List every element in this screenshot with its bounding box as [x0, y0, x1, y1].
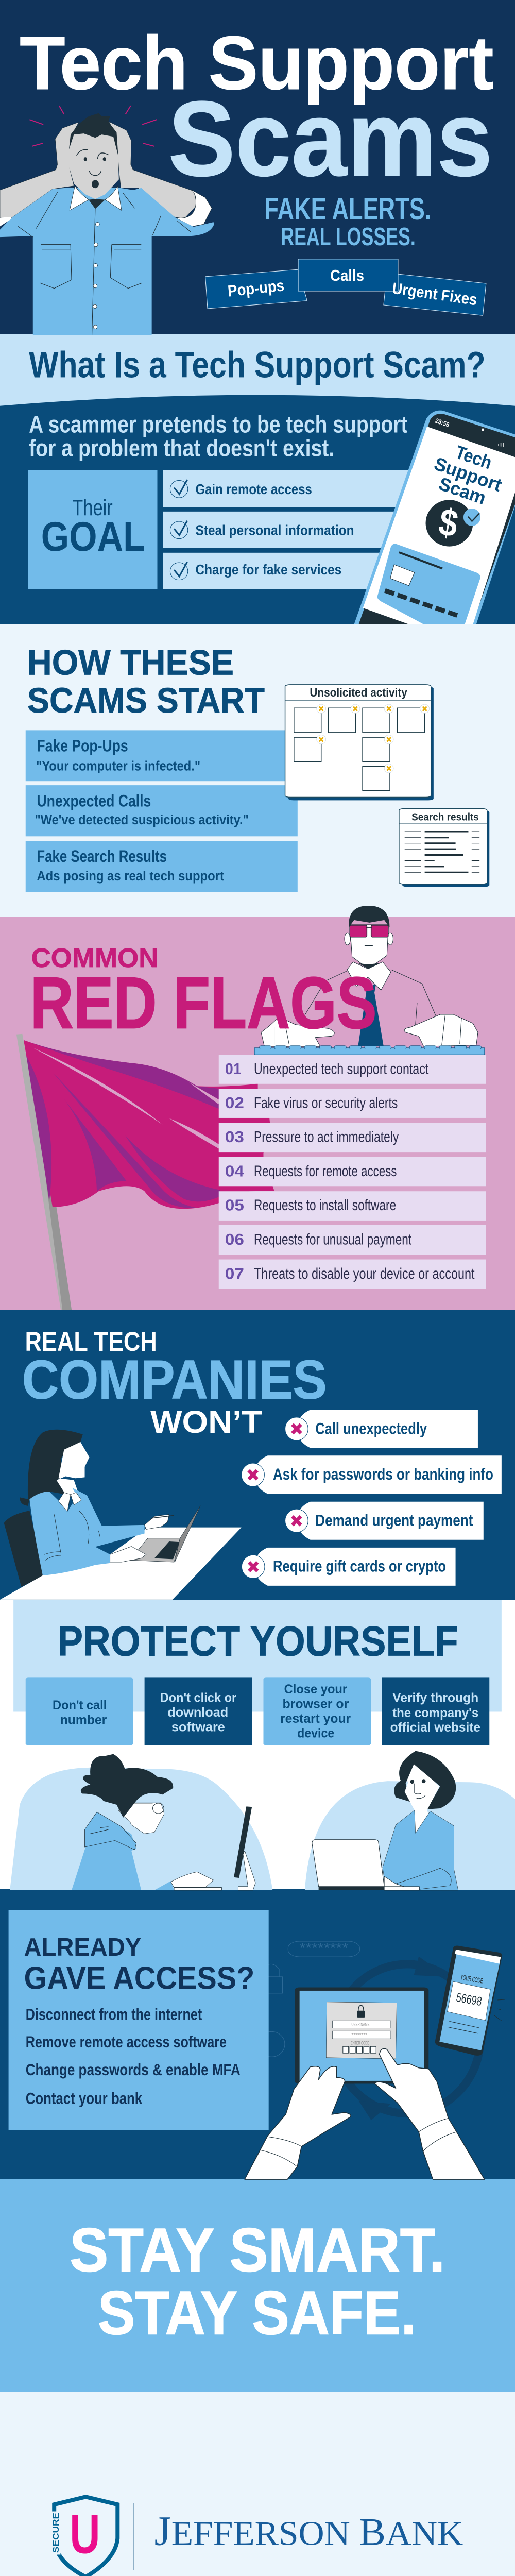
heading: won't: WON’T — [150, 1405, 262, 1440]
card: unexpected calls — [26, 785, 298, 836]
tip: close your browser: browser or — [282, 1697, 349, 1711]
list row 01: 01 — [225, 1060, 242, 1078]
icon: check 3 — [170, 562, 188, 580]
panel: their goal: GOAL — [41, 514, 145, 560]
card: unexpected calls: "We've detected suspicious activity." — [35, 812, 249, 827]
illustration: tablet login: USER NAME — [351, 2022, 369, 2027]
logo: secure label: SECURE — [51, 2513, 61, 2553]
tip: close your browser: Close your — [284, 1682, 347, 1696]
icon: check 2 — [170, 521, 188, 539]
panel: what to do: ALREADY — [24, 1933, 141, 1961]
panel: what to do: GAVE ACCESS? — [24, 1960, 254, 1996]
goal 2: Steal personal information — [195, 522, 354, 538]
list row 04: 04 — [225, 1162, 244, 1180]
tip: don't click or download: download — [167, 1705, 228, 1720]
panel: their goal: Their — [72, 495, 113, 520]
card: fake pop-ups: Fake Pop-Ups — [37, 737, 128, 755]
phone screen text: $ — [436, 500, 461, 545]
card: fake search results: Ads posing as real tech support — [37, 869, 224, 884]
list row 06: 06 — [225, 1230, 244, 1248]
panel: what to do: Contact your bank — [26, 2089, 142, 2108]
tip: don't click or download — [145, 1677, 252, 1745]
list row 06 — [219, 1225, 486, 1255]
list row 07: 07 — [225, 1265, 244, 1282]
phone screen text: Support — [432, 453, 505, 496]
panel: how these scams start — [26, 642, 489, 892]
panel: their goal — [28, 470, 157, 589]
goal 3: Charge for fake services — [195, 562, 341, 578]
list row 04: Requests for remote access — [254, 1163, 397, 1180]
list row 03: 03 — [225, 1128, 244, 1146]
goal rows — [163, 470, 427, 589]
icon: check 1 — [170, 480, 188, 498]
tip: don't call number: Don't call — [53, 1698, 107, 1712]
phone screen text: Tech — [453, 441, 495, 473]
heading: common: COMMON — [31, 943, 158, 973]
slogan line 1: STAY SMART. — [70, 2216, 445, 2285]
tip: don't click or download: software — [171, 1720, 225, 1734]
list row 03 — [219, 1123, 486, 1152]
panel: closing — [49, 2216, 463, 2576]
illustration: tablet login — [295, 1988, 428, 2084]
tag: pop-ups background — [205, 269, 307, 309]
phone screen text: Scam — [436, 473, 489, 509]
illustration: tablet login: ENTER CODE — [351, 2041, 369, 2046]
dark arch background — [0, 395, 515, 624]
list row 05: 05 — [225, 1196, 244, 1214]
tag labels: Urgent Fixes — [391, 279, 478, 309]
list row 01 — [219, 1055, 486, 1084]
phone code text: 56698 — [455, 1991, 483, 2009]
list row 06: Requests for unusual payment — [254, 1231, 411, 1248]
tag: urgent fixes background — [384, 273, 486, 315]
panel: what to do: Remove remote access software — [26, 2033, 227, 2051]
illustration: woman with laptop — [305, 1751, 515, 1890]
panel: header — [0, 21, 494, 335]
card: fake pop-ups — [26, 730, 298, 781]
list row 02: Fake virus or security alerts — [254, 1094, 398, 1112]
tag labels: Calls — [330, 266, 364, 284]
tip: don't call number — [26, 1677, 133, 1745]
card: fake pop-ups: "Your computer is infected." — [36, 759, 200, 774]
panel: already gave access — [9, 1910, 505, 2179]
faint background icons: ******** — [300, 1940, 348, 1956]
phone screen text — [432, 417, 505, 545]
faint background icons — [259, 1940, 359, 2057]
list row 05: Requests to install software — [254, 1197, 396, 1214]
definition text — [29, 411, 407, 462]
slogan line 2: STAY SAFE. — [98, 2279, 417, 2348]
tag labels — [227, 266, 478, 309]
panel: what is a tech support scam — [0, 344, 515, 624]
illustration: shocked man — [0, 106, 214, 335]
circular arrows — [334, 1956, 480, 2120]
list row 03: Pressure to act immediately — [254, 1129, 399, 1146]
tip: don't call number: number — [60, 1713, 107, 1727]
illustration: phone with code — [435, 1946, 505, 2056]
panel: what to do: Change passwords & enable MFA — [26, 2061, 241, 2079]
tip: verify through website — [382, 1677, 489, 1745]
panel: what to do: Disconnect from the internet — [26, 2005, 202, 2024]
heading: HOW THESE — [27, 642, 234, 682]
list row 07 — [219, 1260, 486, 1289]
card: fake search results: Fake Search Results — [37, 848, 167, 866]
phone code text: YOUR CODE — [460, 1973, 484, 1985]
heading background — [13, 1600, 502, 1711]
phone code text — [455, 1973, 484, 2009]
list row 05 — [219, 1191, 486, 1221]
phone screen text: 23:56 — [434, 417, 451, 429]
item: require gift cards — [242, 1548, 456, 1586]
panel: common red flags — [16, 906, 486, 1310]
logo: secure u shield: U — [70, 2503, 100, 2565]
list row 02: 02 — [225, 1094, 244, 1112]
tip: close your browser: restart your — [280, 1711, 351, 1725]
tag: calls background — [298, 259, 398, 291]
item: ask for passwords — [242, 1455, 502, 1494]
illustration: tablet login: ******** — [351, 2032, 367, 2038]
tip: don't click or download: Don't click or — [160, 1690, 236, 1705]
illustration: person at desktop — [10, 1754, 272, 1890]
illustration: woman at laptop — [0, 1430, 242, 1600]
card: unexpected calls: Unexpected Calls — [37, 792, 151, 810]
panel: what to do — [9, 1910, 269, 2130]
tip: close your browser: device — [297, 1726, 334, 1740]
illustration: flag — [16, 1034, 274, 1310]
heading: SCAMS START — [27, 680, 265, 720]
window: search results — [399, 809, 489, 887]
goal 1: Gain remote access — [195, 482, 312, 498]
tag labels: Pop-ups — [227, 276, 285, 300]
window: unsolicited activity: Unsolicited activity — [310, 686, 407, 699]
tip: close your browser — [263, 1677, 371, 1745]
window: unsolicited activity — [285, 685, 434, 800]
panel: real tech companies won't: REAL TECH — [25, 1327, 157, 1357]
panel: real tech companies won't — [0, 1327, 502, 1600]
item: call unexpectedly — [285, 1410, 478, 1448]
item: demand urgent payment — [285, 1502, 484, 1540]
illustration: phone — [354, 411, 515, 624]
panel: protect yourself — [10, 1600, 515, 1890]
list row 02 — [219, 1089, 486, 1118]
illustration: hands — [245, 2048, 485, 2179]
logo: Jefferson Bank: JEFFERSON BANK — [154, 2507, 463, 2554]
list row 04 — [219, 1157, 486, 1186]
logo: secure u shield — [49, 2497, 117, 2576]
card: fake search results — [26, 841, 298, 892]
heading — [27, 642, 265, 720]
illustration: scammer at keyboard — [254, 906, 485, 1055]
